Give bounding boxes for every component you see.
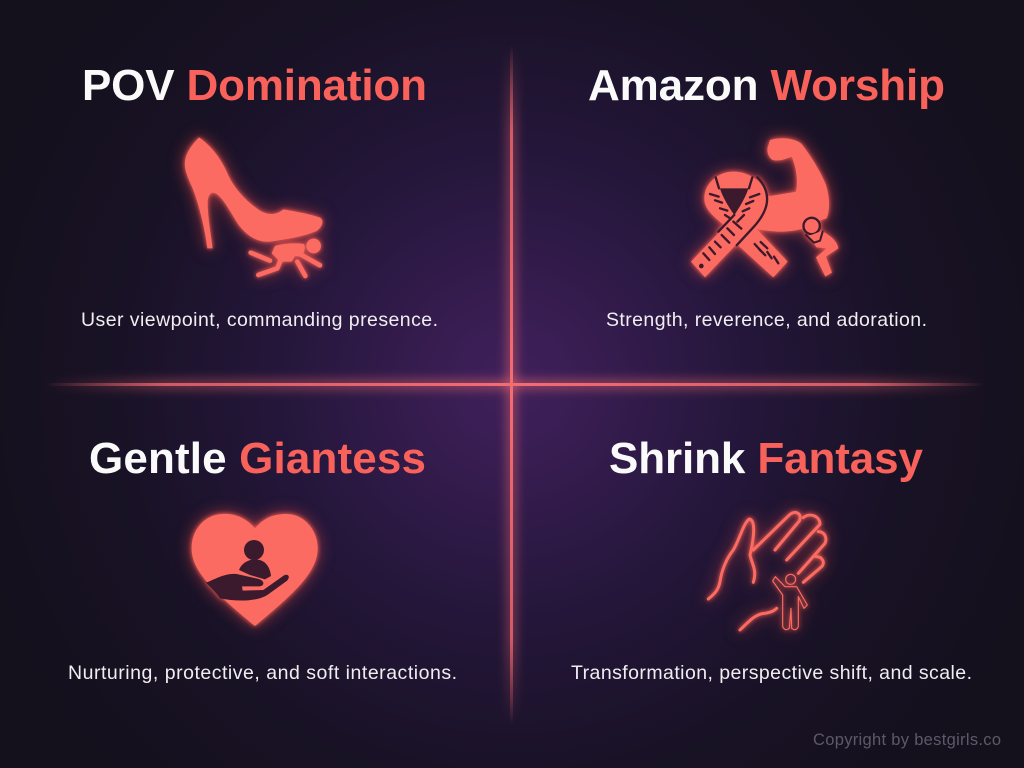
description: Transformation, perspective shift, and scale. — [571, 662, 972, 684]
heading: POV Domination: POV Domination — [82, 61, 427, 110]
icon: outline hand with tiny person — [708, 512, 826, 630]
description: Nurturing, protective, and soft interactions. — [68, 662, 457, 684]
panel: Shrink Fantasy — [571, 434, 972, 684]
panel: POV Domination — [81, 61, 438, 331]
heading: Amazon Worship: Amazon Worship — [588, 61, 945, 110]
heading: Shrink Fantasy: Shrink Fantasy — [609, 434, 924, 483]
panel: Gentle Giantess — [68, 434, 457, 684]
icon: flexed arm, tape ribbon and small figure — [691, 138, 838, 277]
description: User viewpoint, commanding presence. — [81, 309, 438, 331]
panel: Amazon Worship — [588, 61, 945, 331]
description: Strength, reverence, and adoration. — [606, 309, 927, 331]
icon: high heel over crawling figure — [185, 137, 322, 276]
icon: heart with hand holding a figure — [192, 514, 318, 626]
copyright note: Copyright by bestgirls.co — [813, 731, 1001, 749]
heading: Gentle Giantess: Gentle Giantess — [89, 434, 426, 483]
